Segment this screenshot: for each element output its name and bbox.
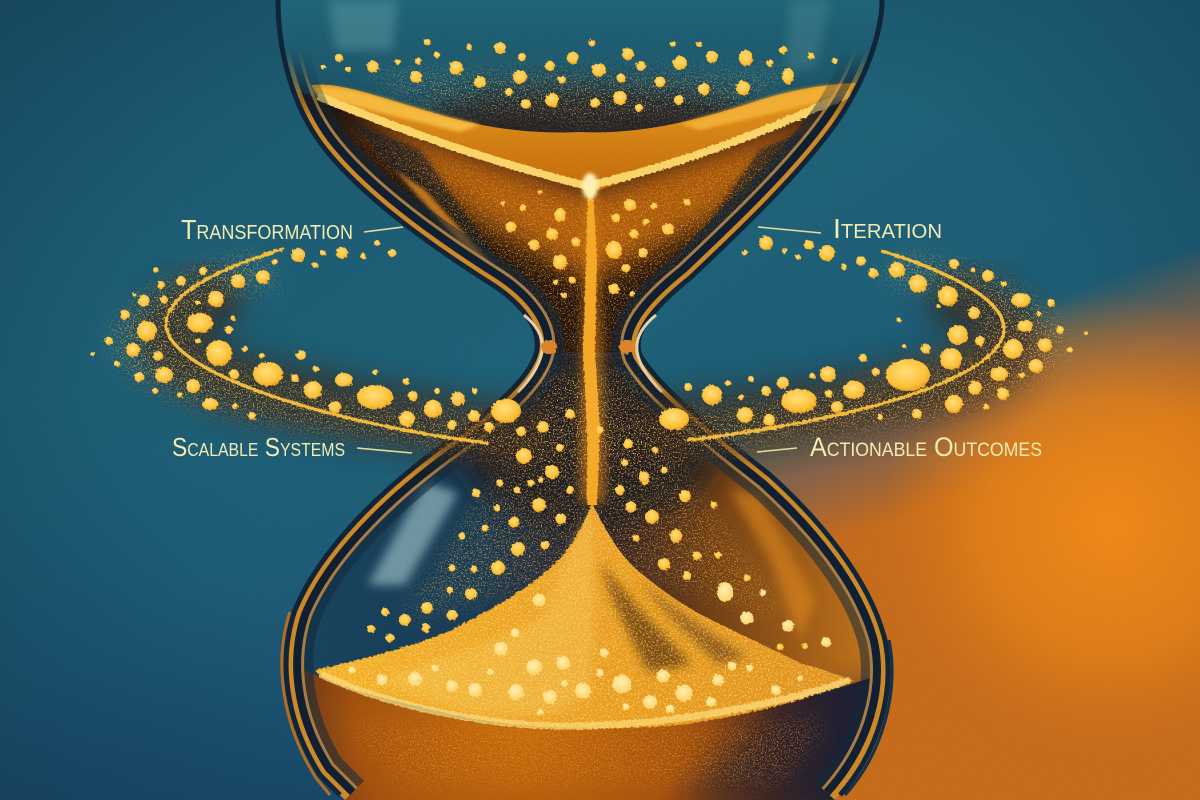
sand grains: left swirl [90, 240, 575, 479]
label: Iteration: Iteration [833, 213, 942, 244]
glass wall bands [278, 0, 888, 800]
sand grains: below top reservoir [500, 190, 690, 298]
pale grains on sand pile [348, 582, 831, 716]
label: Transformation: Transformation [181, 214, 353, 245]
top sand reservoir [300, 83, 860, 352]
bottom sand pile [315, 503, 854, 728]
glass interior [270, 0, 900, 800]
glass outer edge [278, 0, 892, 795]
top bulb glass highlights [328, 0, 830, 70]
swirl haze: dark sand shadow [168, 300, 1011, 435]
swirl speckles [110, 255, 1065, 470]
neck highlights [518, 315, 662, 392]
label: Scalable Systems: Scalable Systems [172, 432, 345, 462]
right orbit ring [688, 251, 1004, 440]
hourglass [270, 0, 900, 800]
sand grains: top bulb [320, 38, 838, 112]
sand grains: right swirl [659, 236, 1088, 430]
label: Actionable Outcomes: Actionable Outcomes [810, 432, 1042, 462]
dark shading over the top sand [416, 68, 756, 132]
top sand ridge [318, 93, 850, 186]
left orbit ring [166, 249, 487, 443]
lower glass highlights [368, 482, 815, 640]
bottom sand base [290, 668, 895, 800]
sand grains: upper bottom bulb [367, 426, 808, 650]
falling sand stream [580, 173, 606, 505]
wall colour streaks [395, 170, 494, 264]
speckle clouds inside glass [340, 70, 840, 785]
label: Iteration [758, 213, 942, 244]
